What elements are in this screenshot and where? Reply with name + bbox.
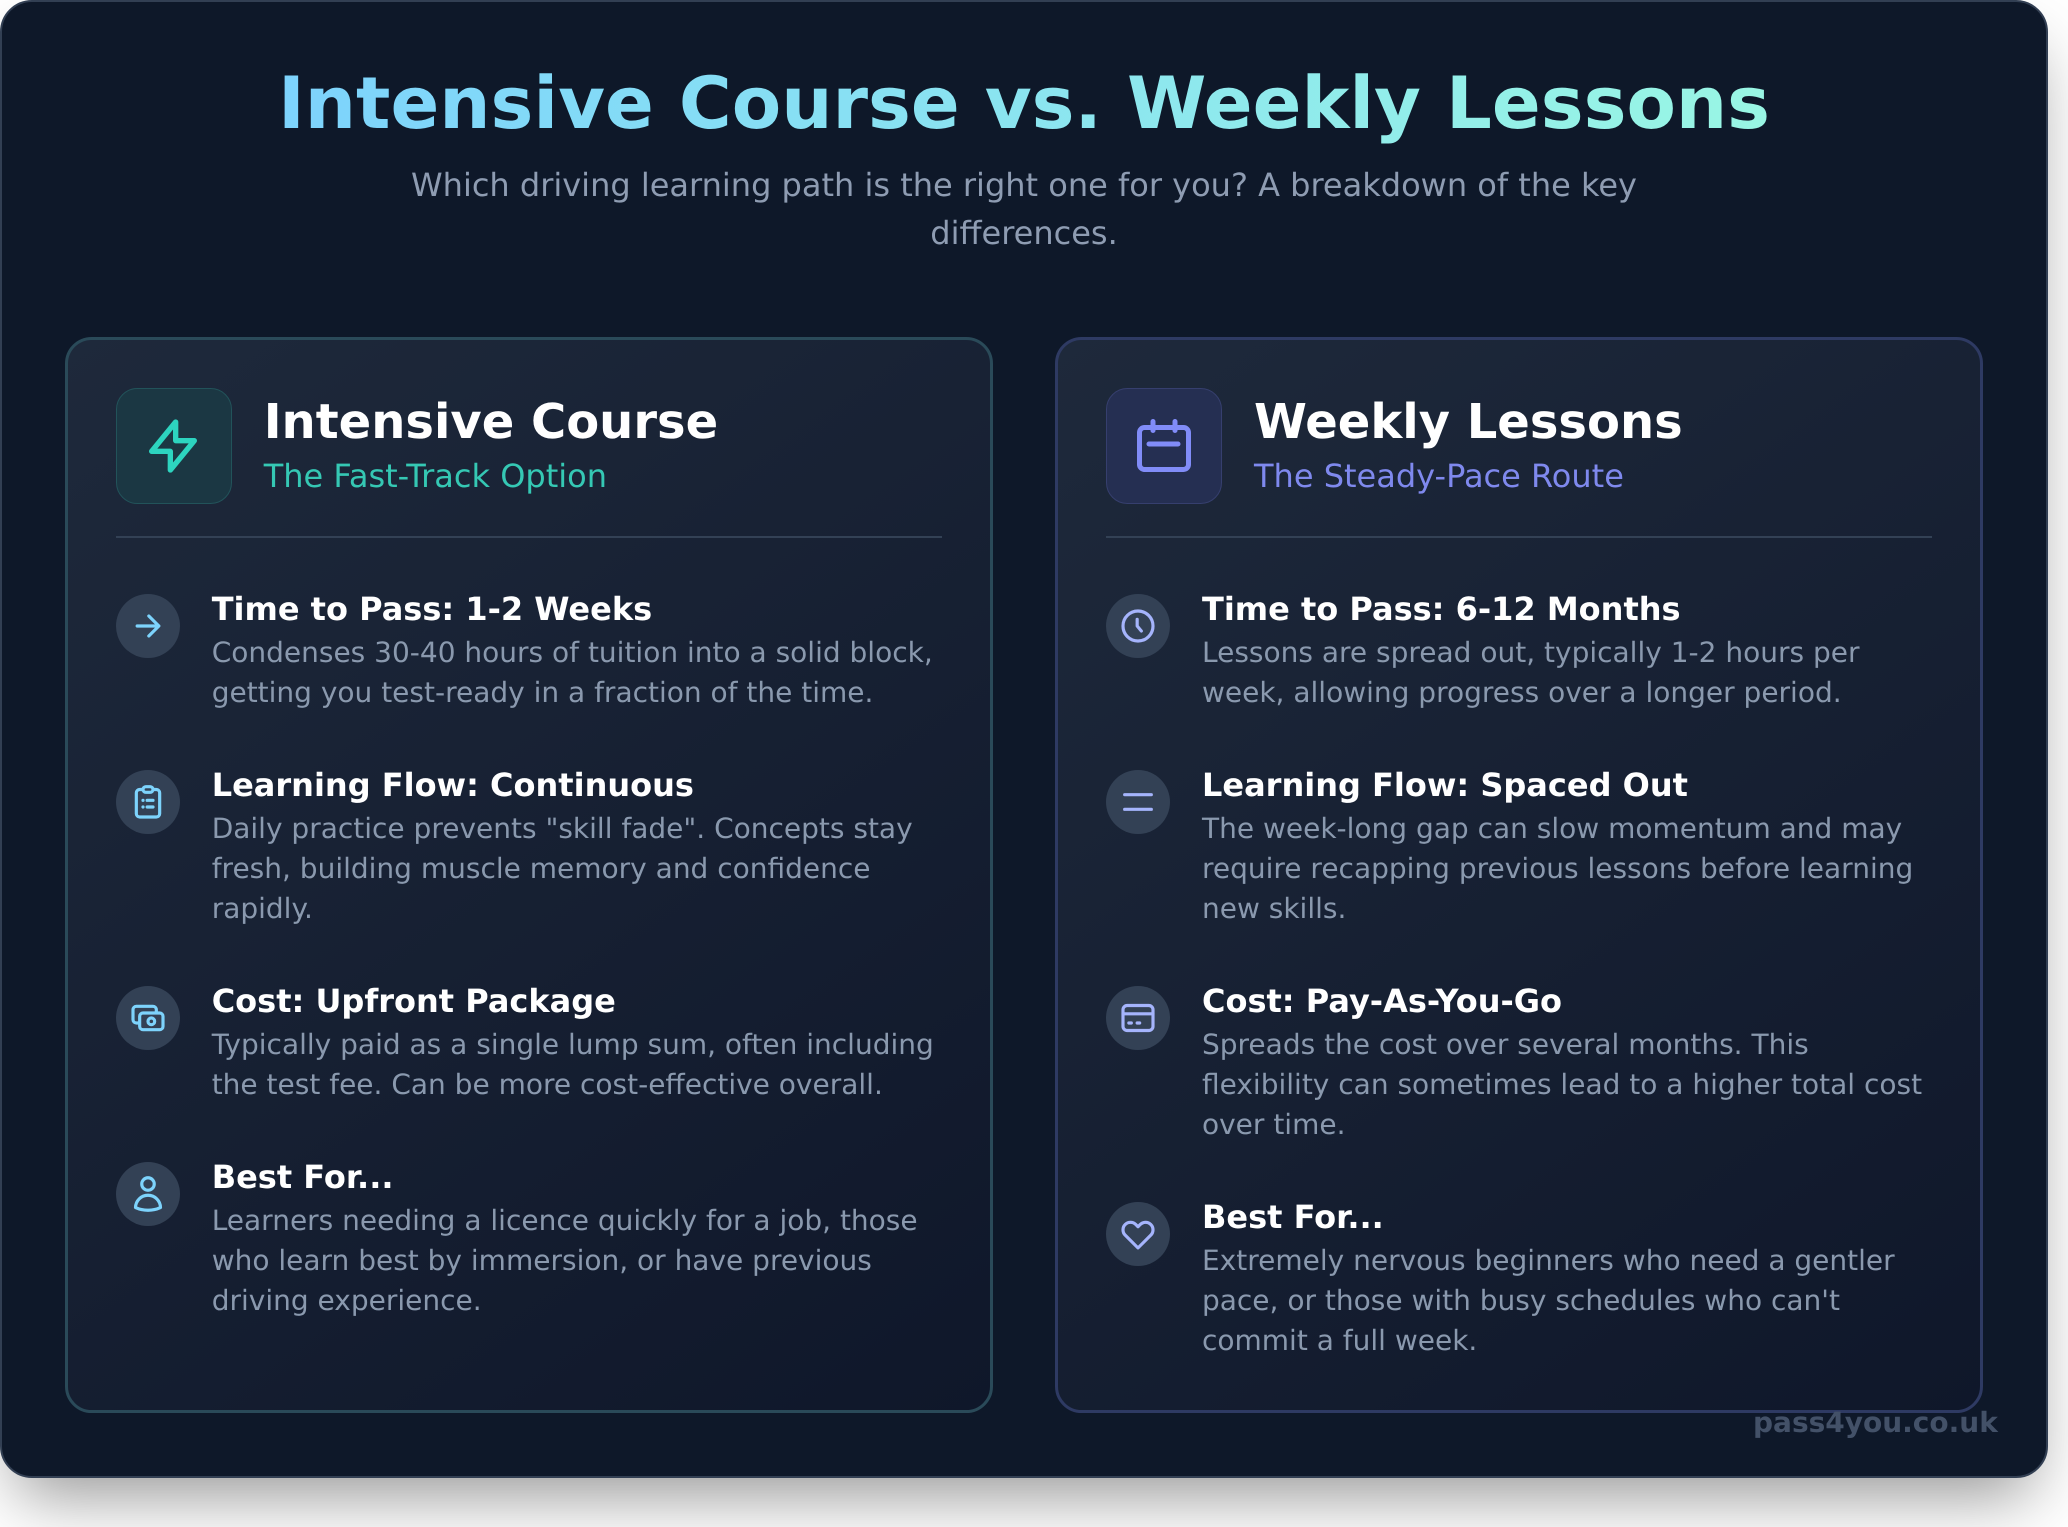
heading: intensive course: Intensive Course [264,394,718,450]
panel: weekly lessons [1055,337,1983,1413]
subtitle [411,166,1637,252]
item text: Learners needing a licence quickly for a job, those [212,1204,918,1237]
item: learning flow [1106,766,1913,925]
item text: fresh, building muscle memory and confidence [212,852,871,885]
subheading: fast-track option: The Fast-Track Option [264,457,607,495]
subtitle: Which driving learning path is the right one for you? A breakdown of the key [411,166,1637,204]
icon: clipboard list [116,770,180,834]
item text [212,636,933,709]
item heading: Learning Flow: Spaced Out [1202,766,1688,804]
item heading: Cost: Pay-As-You-Go [1202,982,1562,1020]
icon: equals lines [1106,770,1170,834]
item text: commit a full week. [1202,1324,1477,1357]
icon: lightning bolt [116,388,232,504]
item text: Daily practice prevents "skill fade". Concepts stay [212,812,913,845]
item text [212,1204,918,1317]
item text [1202,1028,1922,1141]
icon: credit card [1106,986,1170,1050]
heading: weekly lessons: Weekly Lessons [1254,394,1683,450]
panel: intensive course [65,337,993,1413]
item text: Typically paid as a single lump sum, often including [212,1028,934,1061]
item heading: Time to Pass: 6-12 Months [1202,590,1681,628]
item heading: Learning Flow: Continuous [212,766,694,804]
item: best for [116,1158,918,1317]
icon: person [116,1162,180,1226]
item text: getting you test-ready in a fraction of the time. [212,676,873,709]
item text: Spreads the cost over several months. This [1202,1028,1809,1061]
item text: week, allowing progress over a longer period. [1202,676,1842,709]
item: cost [1106,982,1922,1141]
icon: heart [1106,1202,1170,1266]
watermark: pass4you.co.uk [1753,1406,1998,1439]
item heading: Best For... [1202,1198,1384,1236]
item: best for [1106,1198,1895,1357]
item text: Lessons are spread out, typically 1-2 hours per [1202,636,1859,669]
icon: arrow right [116,594,180,658]
item text [212,1028,934,1101]
item: time to pass [1106,590,1860,709]
icon: clock [1106,594,1170,658]
item text: the test fee. Can be more cost-effective overall. [212,1068,883,1101]
item text: over time. [1202,1108,1345,1141]
item text [1202,1244,1895,1357]
item: time to pass [116,590,933,709]
item text: flexibility can sometimes lead to a higher total cost [1202,1068,1922,1101]
item heading: Cost: Upfront Package [212,982,616,1020]
item text [1202,812,1913,925]
item text: pace, or those with busy schedules who can't [1202,1284,1840,1317]
title: Intensive Course vs. Weekly Lessons [278,61,1770,145]
icon: calendar [1106,388,1222,504]
subtitle: differences. [930,214,1118,252]
item text [1202,636,1860,709]
item: learning flow [116,766,913,925]
item text: The week-long gap can slow momentum and may [1202,812,1902,845]
item text [212,812,913,925]
item text: new skills. [1202,892,1346,925]
item text: Extremely nervous beginners who need a gentler [1202,1244,1895,1277]
item text: require recapping previous lessons before learning [1202,852,1913,885]
item text: rapidly. [212,892,313,925]
item heading: Best For... [212,1158,394,1196]
icon: cash [116,986,180,1050]
subheading: steady-pace route: The Steady-Pace Route [1254,457,1624,495]
item text: Condenses 30-40 hours of tuition into a solid block, [212,636,933,669]
item: cost [116,982,934,1101]
item heading: Time to Pass: 1-2 Weeks [212,590,652,628]
item text: driving experience. [212,1284,482,1317]
item text: who learn best by immersion, or have previous [212,1244,872,1277]
